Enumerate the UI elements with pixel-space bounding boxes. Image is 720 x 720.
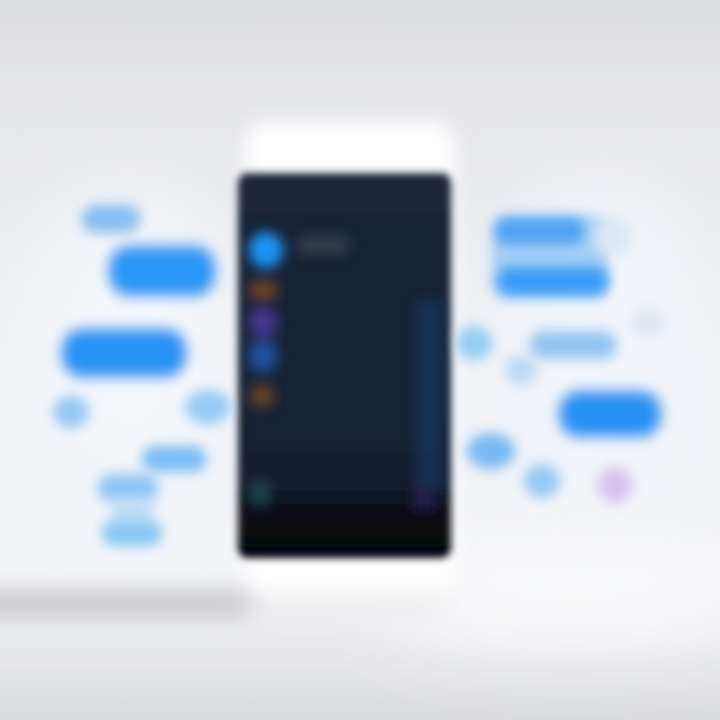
bubble: small left bbox=[53, 396, 89, 428]
bubble: lower left one bbox=[142, 446, 206, 472]
phone body bbox=[246, 122, 454, 592]
contact avatar: blue bbox=[249, 232, 283, 268]
bubble: lower left two bbox=[98, 474, 158, 502]
bubble: top right bbox=[496, 218, 584, 244]
bubble: outline right bbox=[631, 307, 665, 337]
message line bbox=[298, 236, 348, 254]
phone screen bbox=[238, 173, 451, 558]
bubble: outline top right bbox=[594, 220, 630, 254]
bubble: middle right pale bbox=[530, 331, 616, 359]
bubble: purple bbox=[598, 467, 632, 503]
contact avatar: teal bbox=[249, 480, 271, 506]
contact avatar: purple bbox=[249, 308, 277, 336]
contact avatar: orange bbox=[249, 280, 277, 300]
bubble: lower left connector bbox=[112, 500, 152, 522]
phone bbox=[238, 122, 454, 592]
bubble: top left pale bbox=[82, 205, 140, 233]
contact avatar: blue dark bbox=[249, 340, 277, 372]
contact avatar: brown bbox=[250, 384, 274, 408]
bubble: bottom left bbox=[102, 520, 162, 546]
bubble: lower right bright bbox=[558, 390, 662, 438]
screen content bbox=[249, 232, 442, 510]
bubble: small round bbox=[524, 464, 560, 498]
bubble: top right halo bbox=[492, 216, 608, 298]
bubble: tail right bbox=[506, 356, 536, 384]
floor shadow bbox=[0, 585, 440, 621]
bubble: small lower bbox=[467, 433, 515, 469]
bubble: middle left bright bbox=[61, 328, 187, 378]
left chat bubbles bbox=[53, 205, 231, 546]
right chat bubbles bbox=[456, 216, 665, 503]
bubble: small near phone bbox=[185, 390, 231, 424]
bubble: small beside phone bbox=[456, 326, 492, 360]
screen right edge tint bbox=[416, 300, 442, 490]
purple glow bbox=[412, 486, 436, 510]
bubble: upper right bright bbox=[498, 267, 608, 295]
background glow bbox=[30, 180, 720, 635]
bubble: upper left bright bbox=[108, 245, 216, 297]
